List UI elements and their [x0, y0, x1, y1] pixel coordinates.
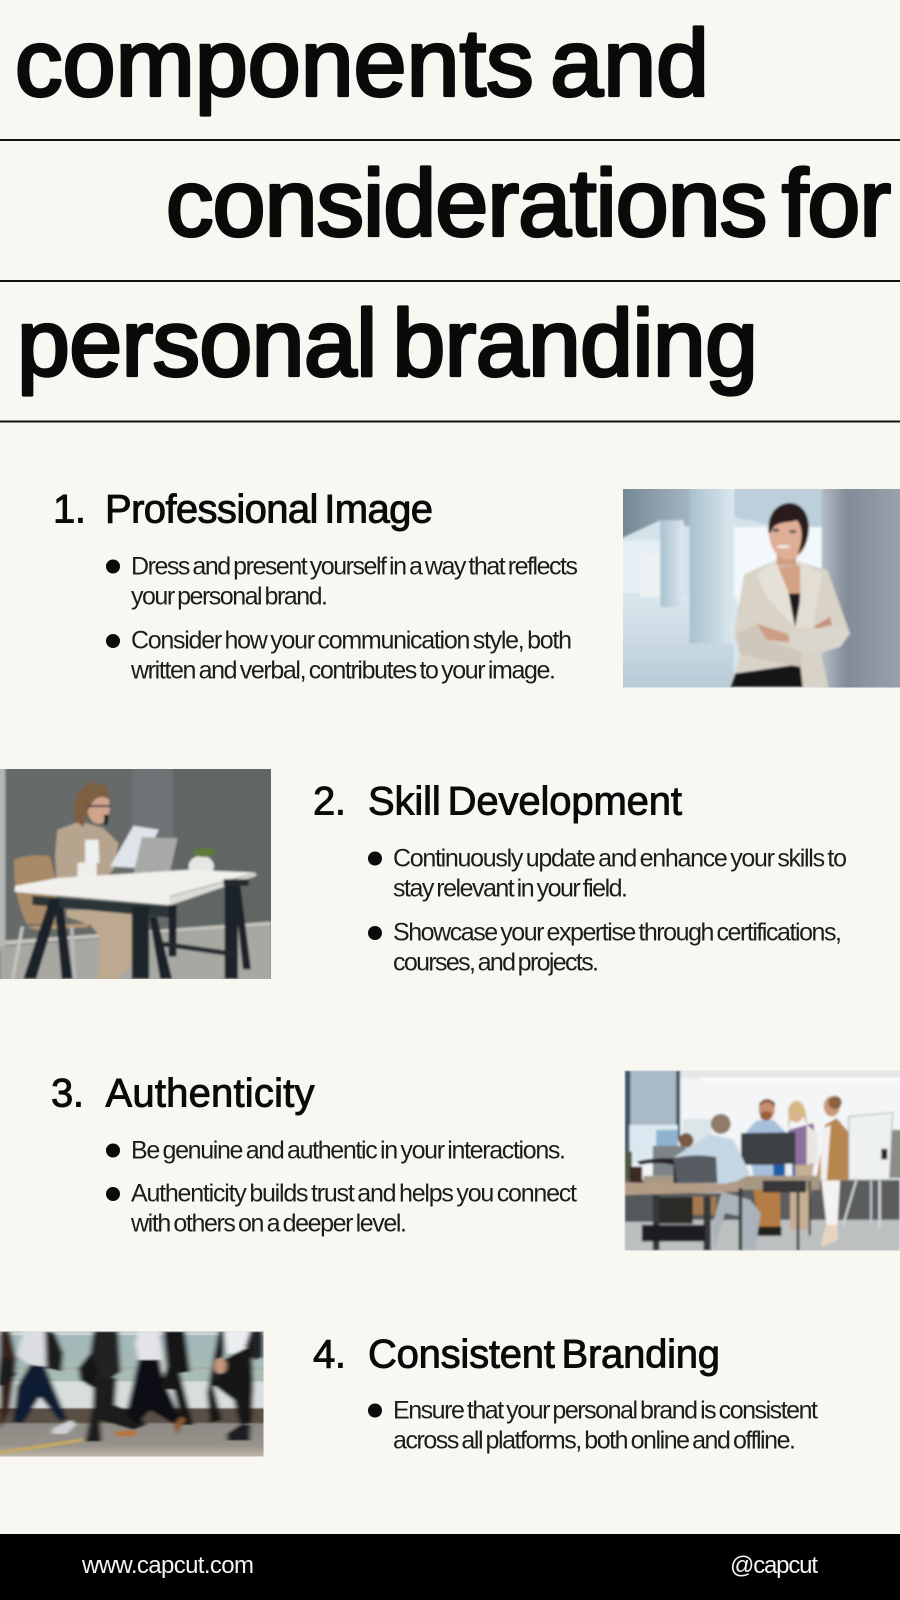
- lower room: [624, 1180, 900, 1222]
- bullet 2: courses, and projects.: [393, 948, 599, 976]
- footer: [0, 1534, 900, 1600]
- chair: [14, 855, 57, 925]
- heading number 4: 4.: [313, 1332, 346, 1376]
- bullet 1: your personal brand.: [131, 582, 328, 610]
- bullet 1: across all platforms, both online and offline.: [393, 1426, 796, 1454]
- bullet 1: [368, 1396, 818, 1454]
- title: [0, 10, 900, 422]
- heading: authenticity: Authenticity: [106, 1072, 314, 1116]
- photo: businesswoman with crossed arms: [623, 489, 900, 688]
- heading: consistent branding: Consistent Branding: [368, 1332, 720, 1376]
- bullet 2: written and verbal, contributes to your image.: [130, 656, 556, 684]
- photo: woman working at desk: [0, 769, 271, 979]
- bullet 2: [368, 918, 842, 976]
- seated colleague back: [679, 1133, 693, 1148]
- panel: consistent branding: [313, 1332, 818, 1454]
- bullet 2: [106, 626, 572, 684]
- woman in tan jacket: [817, 1118, 851, 1180]
- walker left: [17, 1332, 45, 1368]
- heading number 1: 1.: [53, 488, 86, 532]
- heading: professional image: Professional Image: [105, 488, 433, 532]
- panel: authenticity: [51, 1072, 577, 1238]
- standing people: [746, 1120, 785, 1176]
- bullet 2: [106, 1180, 577, 1238]
- walker right: [207, 1332, 224, 1423]
- woman: [55, 821, 118, 882]
- panel: skill development: [313, 780, 847, 976]
- bullet 1: Ensure that your personal brand is consistent: [393, 1396, 818, 1424]
- bullet 2: Consider how your communication style, both: [131, 626, 572, 654]
- bullet 1: Continuously update and enhance your skills to: [393, 844, 847, 872]
- bullet 1: stay relevant in your field.: [393, 874, 628, 902]
- bullet 1: [368, 844, 847, 902]
- footer website: www.capcut.com: [81, 1552, 254, 1579]
- front desk: [624, 1182, 742, 1195]
- heading number 2: 2.: [313, 780, 346, 824]
- footer handle: @capcut: [730, 1552, 818, 1579]
- walker centre-right: [135, 1332, 165, 1373]
- heading: skill development: Skill Development: [368, 780, 682, 824]
- central desk and monitor: [741, 1132, 795, 1165]
- office chair: [637, 1158, 697, 1183]
- photo: commuters walking in motion: [0, 1332, 264, 1456]
- title line 3: personal branding: [17, 290, 758, 396]
- bullet 1: [106, 552, 578, 610]
- whiteboard: [849, 1112, 893, 1180]
- woman: [730, 560, 850, 688]
- bullet 2: Authenticity builds trust and helps you connect: [131, 1180, 577, 1208]
- seated man: [675, 1134, 750, 1193]
- bullet 2: with others on a deeper level.: [130, 1210, 407, 1238]
- table: [15, 870, 256, 905]
- title line 2: considerations for: [166, 150, 891, 256]
- walker centre: [90, 1332, 121, 1380]
- photo: team meeting in office: [624, 1070, 900, 1250]
- bullet 1: Be genuine and authentic in your interactions.: [131, 1136, 566, 1164]
- heading number 3: 3.: [51, 1072, 84, 1116]
- title line 1: components and: [15, 10, 709, 116]
- panel: professional image: [53, 488, 578, 684]
- bullet 1: Dress and present yourself in a way that reflects: [131, 552, 578, 580]
- bullet 2: Showcase your expertise through certifications,: [393, 918, 842, 946]
